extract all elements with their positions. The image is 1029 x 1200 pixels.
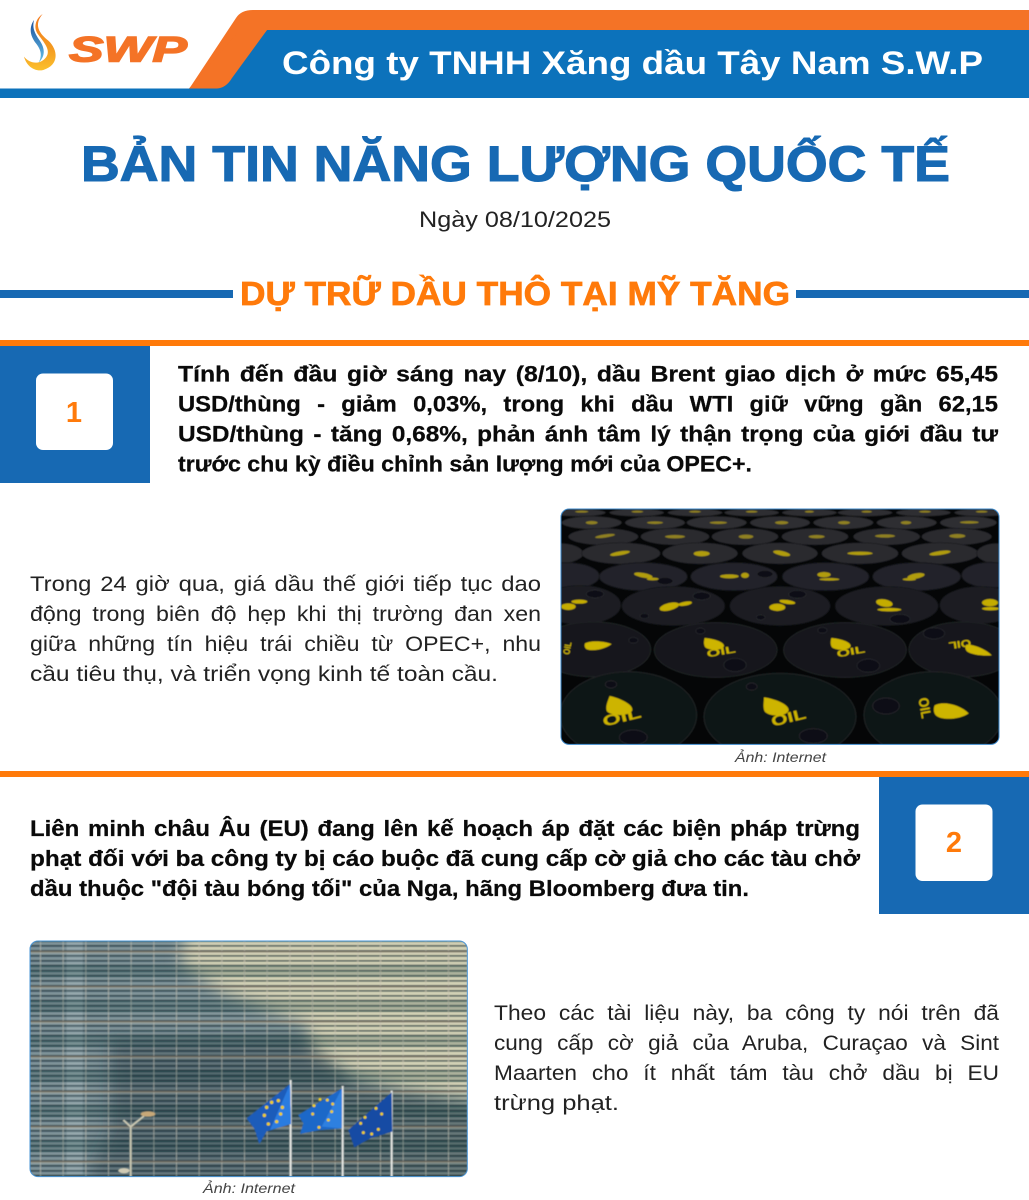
sunlit facade: [180, 930, 487, 1100]
photo: oil barrels: OIL: [770, 706, 808, 731]
number badge 1: [0, 346, 150, 483]
panel: item 2: [0, 771, 1029, 914]
text block: market summary: động trong biên độ hẹp khi thị trường đan xen: [30, 603, 541, 626]
photo: oil barrels: OIL: [836, 644, 866, 660]
text block: market summary: [30, 573, 541, 686]
caption: photo 2: Ảnh: Internet: [202, 1179, 296, 1196]
text block: market summary: giữa những tín hiệu trái chiều từ OPEC+, nhu: [30, 633, 541, 656]
lead text 1: Tính đến đầu giờ sáng nay (8/10), dầu Brent giao dịch ở mức 65,45: [178, 362, 998, 386]
logo SWP: [24, 14, 188, 70]
icon: flame: [24, 14, 56, 70]
section heading: DỰ TRỮ DẦU THÔ TẠI MỸ TĂNG: [240, 274, 790, 312]
photo: oil barrels: OIL: [948, 636, 972, 650]
barrel tops: [551, 509, 1009, 529]
panel: item 1: [0, 340, 1029, 483]
lead text 2: phạt đối với ba công ty bị cáo buộc đã cung cấp cờ giả cho các tàu chở: [30, 846, 860, 871]
lead text 1: USD/thùng - tăng 0,68%, phản ánh tâm lý thận trọng của giới đầu tư: [178, 422, 998, 446]
number badge 1: 1: [66, 397, 82, 429]
caption: photo 1: Ảnh: Internet: [734, 748, 827, 765]
wordmark: SWP: [69, 30, 188, 70]
photo: oil barrels: [560, 508, 1000, 745]
text block: sanction details: trừng phạt.: [494, 1092, 619, 1115]
text block: market summary: Trong 24 giờ qua, giá dầu thế giới tiếp tục dao: [30, 573, 541, 596]
text block: market summary: cầu tiêu thụ, và triển vọng kinh tế toàn cầu.: [30, 663, 498, 686]
shaded facade: [87, 1037, 487, 1183]
lead text 1: trước chu kỳ điều chỉnh sản lượng mới của OPEC+.: [178, 452, 752, 476]
title: BẢN TIN NĂNG LƯỢNG QUỐC TẾ: [81, 135, 950, 192]
text block: sanction details: Theo các tài liệu này, ba công ty nói trên đã: [494, 1002, 999, 1025]
text block: sanction details: Maarten cho ít nhất tám tàu chở dầu bị EU: [494, 1062, 999, 1085]
text block: sanction details: [494, 1002, 999, 1115]
number badge 2: 2: [946, 827, 962, 859]
lead text 2: [30, 816, 860, 901]
yellow oil marks: [606, 696, 632, 715]
header orange ribbon tip: [189, 30, 267, 88]
section heading: [0, 274, 1029, 312]
number badge 2: [879, 777, 1029, 914]
header orange ribbon: [189, 10, 1029, 89]
lead text 2: Liên minh châu Âu (EU) đang lên kế hoạch áp đặt các biện pháp trừng: [30, 816, 860, 841]
photo: oil barrels: OIL: [601, 705, 643, 731]
photo: EU building and flags: [30, 940, 468, 1178]
lead text 1: USD/thùng - giảm 0,03%, trong khi dầu WTI giữ vững gần 62,15: [178, 392, 998, 416]
photo: oil barrels: OIL: [915, 696, 935, 720]
date: Ngày 08/10/2025: [419, 207, 611, 232]
header banner: [0, 10, 1029, 98]
lead text 1: [178, 362, 998, 476]
flags: [247, 1080, 392, 1177]
photo: oil barrels: OIL: [706, 644, 737, 660]
company name: Công ty TNHH Xăng dầu Tây Nam S.W.P: [282, 45, 983, 81]
barrel plugs: [586, 570, 945, 745]
lead text 2: dầu thuộc "đội tàu bóng tối" của Nga, hãng Bloomberg đưa tin.: [30, 876, 749, 901]
text block: sanction details: cung cấp cờ giả của Aruba, Curaçao và Sint: [494, 1032, 999, 1055]
header blue band: [0, 30, 1029, 98]
photo: oil barrels: OIL: [561, 641, 574, 655]
lamp post: [118, 1111, 155, 1177]
